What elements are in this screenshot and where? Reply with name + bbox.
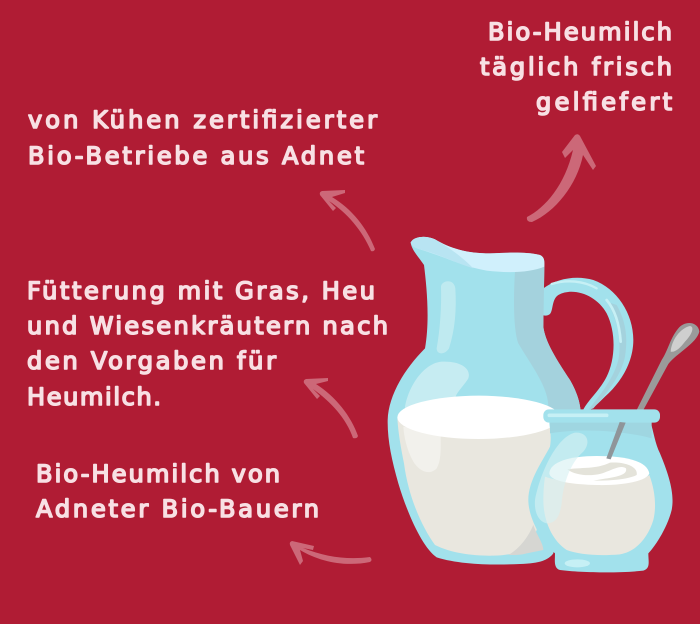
text: certified organic farms: von Kühen zertifizierter — [28, 106, 377, 134]
arrow: to certified farms — [320, 190, 375, 251]
icon: jar — [528, 409, 673, 572]
icon: yogurt — [543, 456, 655, 555]
text: feeding: Heumilch. — [27, 383, 161, 411]
text: certified organic farms: Bio-Betriebe aus Adnet — [28, 142, 364, 170]
icon: spoon stem and bowl highlight — [606, 326, 692, 459]
text: feeding: den Vorgaben für — [27, 347, 276, 375]
text: certified organic farms — [28, 106, 377, 170]
jug glass reflection — [405, 362, 469, 412]
text: daily fresh delivery: täglich frisch — [480, 53, 672, 81]
text: daily fresh delivery: Bio-Heumilch — [488, 18, 672, 46]
jar lid rim — [543, 409, 660, 423]
text: daily fresh delivery — [480, 18, 672, 116]
jar glass reflection — [535, 433, 587, 523]
icon: spoon handle — [637, 323, 699, 410]
text: organic hay milk from Adnet farmers: Adneter Bio-Bauern — [36, 495, 319, 523]
arrow: to feeding — [304, 378, 358, 438]
text: daily fresh delivery: gelfiefert — [536, 88, 672, 116]
icon: jug body — [388, 237, 581, 565]
jar base highlight — [565, 559, 590, 567]
text: organic hay milk from Adnet farmers: Bio-Heumilch von — [36, 460, 280, 488]
milk reflection — [403, 427, 441, 472]
illustration: milk jug and yogurt jar — [388, 237, 699, 572]
arrow: to daily delivery — [527, 134, 596, 222]
icon: jug handle — [543, 278, 633, 411]
jug shaded side — [514, 267, 581, 420]
jug highlight — [437, 281, 456, 353]
arrow: to hay milk — [290, 541, 372, 565]
milk shadow — [508, 525, 543, 555]
milk surface — [397, 396, 560, 439]
text: organic hay milk from Adnet farmers — [36, 460, 319, 523]
text: feeding — [27, 277, 388, 411]
jug mouth — [411, 237, 544, 272]
milk body — [397, 418, 560, 556]
text: feeding: Fütterung mit Gras, Heu — [27, 277, 375, 305]
text: feeding: und Wiesenkräutern nach — [27, 312, 388, 340]
